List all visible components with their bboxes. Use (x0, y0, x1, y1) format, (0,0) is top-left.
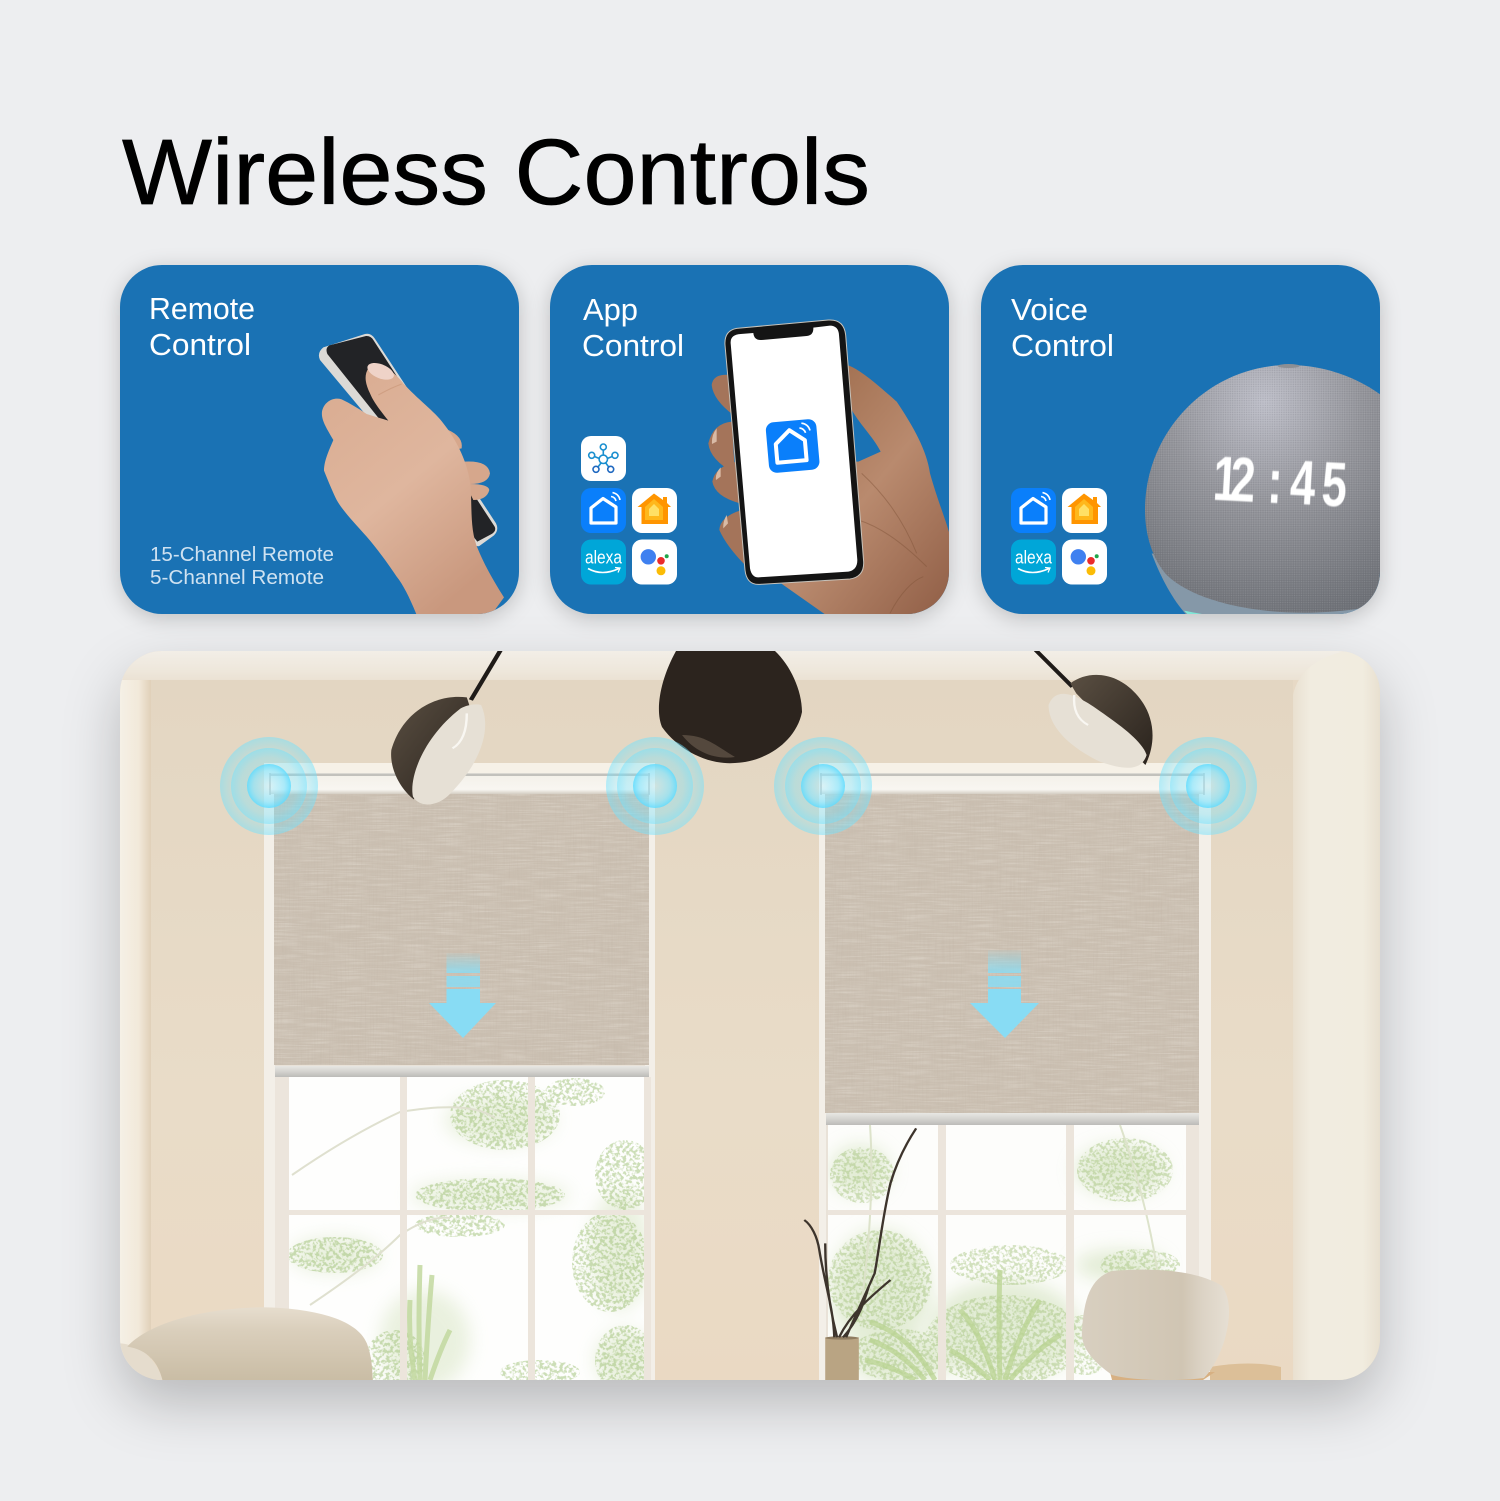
left pendant lamp (391, 650, 501, 804)
speaker sphere (1145, 365, 1383, 613)
remote body (319, 334, 497, 546)
title: Wireless Controls (122, 120, 870, 224)
icon: apple home (632, 488, 677, 533)
left shade roller (269, 773, 650, 795)
top button (1278, 364, 1300, 368)
palm creases (858, 473, 927, 613)
infographic canvas (92, 136, 1408, 1432)
left window mullions (275, 1077, 651, 1380)
icon: google assistant (1062, 540, 1107, 584)
clock display: 12:45 (1211, 444, 1349, 520)
panel: app control (550, 265, 952, 617)
right stool (1082, 1270, 1229, 1380)
left shade fabric (274, 793, 649, 1065)
finger nails (712, 428, 728, 528)
heading: voice control: Control (1011, 328, 1114, 363)
signal ripple: left window left (220, 737, 318, 835)
image: hand holding phone (708, 320, 952, 617)
right window mullions (828, 1125, 1199, 1380)
text: channel options: 5-Channel Remote (150, 567, 324, 589)
right pendant lamp (1036, 650, 1153, 768)
signal ripple: right window right (1159, 737, 1257, 835)
base light ring (1184, 610, 1202, 614)
center pendant lamp (659, 651, 802, 763)
icon: alexa: alexa (585, 548, 623, 568)
text: channel options: 15-Channel Remote (150, 544, 334, 566)
icon: alexa (1011, 540, 1056, 584)
icon: alexa: alexa (1015, 548, 1053, 568)
app icon on phone (765, 419, 820, 473)
icon: alexa (581, 540, 626, 584)
panel: remote control (120, 265, 519, 617)
left window (264, 763, 655, 1395)
icon: apple home (1062, 488, 1107, 533)
left window glass (289, 1077, 645, 1380)
speaker mesh (1145, 365, 1383, 613)
left wall column (120, 678, 151, 1380)
fingers (708, 375, 747, 567)
right wall column (1293, 651, 1380, 1380)
remote face (327, 336, 495, 542)
signal ripple: right window left (774, 737, 872, 835)
left shade bottom bar (275, 1066, 649, 1077)
speaker base (1152, 553, 1382, 617)
image: hand holding remote (319, 334, 504, 617)
icon: smart life home (581, 488, 626, 533)
panel: voice control (981, 265, 1383, 617)
knuckle shading (378, 384, 402, 395)
back wall (150, 678, 1293, 1380)
hand and wrist (322, 365, 504, 617)
arrow: right shade down (970, 950, 1039, 1038)
heading: remote control: Control (149, 327, 251, 362)
right window (819, 763, 1211, 1385)
icon: google assistant (632, 540, 677, 584)
heading: remote control: Remote (149, 291, 255, 326)
ceiling band (120, 651, 1380, 680)
arrow: left shade down (429, 953, 496, 1038)
back fingers (448, 430, 490, 500)
panel: room with motorized roller shades (118, 650, 1380, 1395)
stool legs (1110, 1372, 1215, 1380)
left window foliage (287, 1078, 655, 1395)
right window glass (828, 1125, 1186, 1380)
vase and branches (804, 1128, 916, 1381)
right window foliage (828, 1125, 1180, 1385)
side table (1210, 1364, 1281, 1380)
right shade fabric (825, 793, 1199, 1113)
heading: voice control: Voice (1011, 292, 1088, 327)
signal ripple: left window right (606, 737, 704, 835)
left armchair (118, 1307, 373, 1382)
hand palm and thumb (782, 366, 949, 614)
right shade bottom bar (826, 1113, 1199, 1125)
phone screen (731, 326, 857, 577)
right shade roller (819, 763, 1211, 795)
heading: app control: Control (582, 328, 684, 363)
heading: app control: App (583, 292, 638, 327)
icon: smartthings (581, 436, 626, 481)
thumb nail (367, 363, 394, 380)
image: smart speaker (1145, 364, 1383, 617)
icon: smart life home (1011, 488, 1056, 533)
phone body (725, 320, 864, 584)
